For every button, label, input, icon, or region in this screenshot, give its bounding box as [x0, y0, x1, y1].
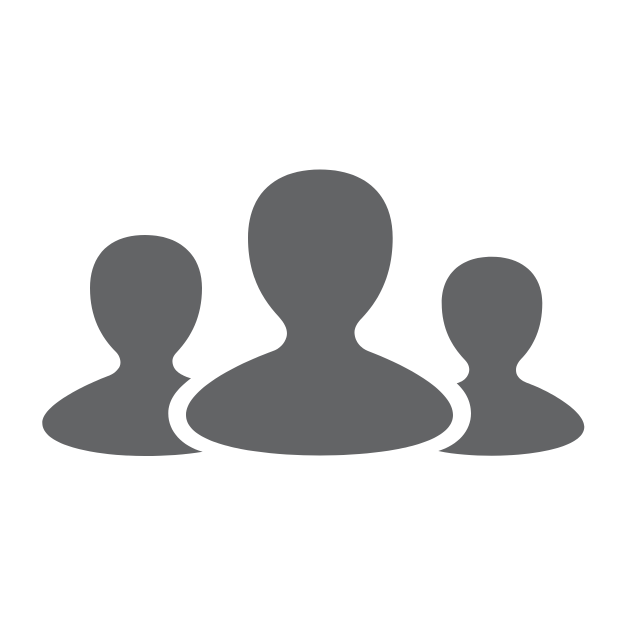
icon: right person silhouette	[438, 257, 584, 456]
icon: left person silhouette	[42, 235, 203, 456]
icon: centre person silhouette	[186, 170, 453, 456]
